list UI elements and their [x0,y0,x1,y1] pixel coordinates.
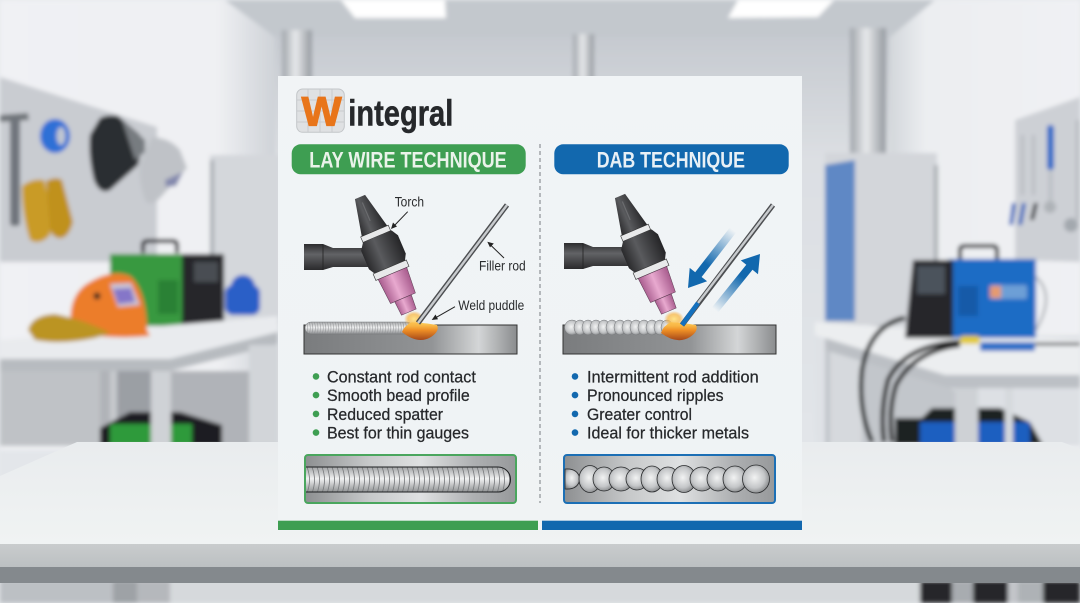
flame [404,311,424,327]
label: torch [391,194,424,229]
icon: torch [564,188,687,319]
(helmet on bench) [71,273,150,337]
foreground white table [0,442,1080,583]
plate [563,325,776,354]
icon: torch [304,189,427,320]
list: lay wire benefits: Smooth bead profile [327,386,470,405]
list: lay wire benefits: Constant rod contact [327,367,476,386]
label: filler rod: Filler rod [479,258,526,274]
weld puddle [402,322,438,340]
diagram: lay wire welding [304,189,526,354]
arrow: rod moves up [712,254,760,312]
label: weld puddle [432,297,524,320]
list: lay wire benefits: Reduced spatter [327,405,443,424]
diagram: dab welding [563,188,776,354]
arrow: rod moves down [688,228,736,288]
divider [539,144,541,503]
list: lay wire benefits: Best for thin gauges [327,424,469,442]
logo: Wintegral: integral [348,93,453,134]
heading: dab technique: DAB TECHNIQUE [597,147,745,172]
label: weld puddle: Weld puddle [458,297,524,313]
list: dab benefits: Pronounced ripples [587,386,724,405]
list: dab benefits [572,367,759,442]
plate [304,325,517,354]
label: torch: Torch [395,194,424,210]
bead photo: smooth lay wire bead [305,455,516,503]
logo: Wintegral [297,89,453,135]
footer bar: green [278,521,538,530]
logo: Wintegral: W [302,89,342,135]
list: lay wire benefits [313,367,476,442]
list: dab benefits: Greater control [587,405,692,424]
list: dab benefits: Intermittent rod addition [587,367,759,386]
label: filler rod [479,242,526,274]
list: dab benefits: Ideal for thicker metals [587,424,749,442]
weld puddle [661,322,697,340]
heading: dab technique [554,144,789,174]
heading: lay wire technique: LAY WIRE TECHNIQUE [309,147,507,172]
weld ripples bead [564,320,673,335]
bead photo: rippled dab bead [564,455,775,503]
panel: infographic poster [278,76,802,531]
flame [664,311,684,327]
filler rod with blue tip [682,205,773,325]
weld bead [305,322,413,334]
footer bar: blue [542,521,802,530]
filler rod [418,205,507,323]
